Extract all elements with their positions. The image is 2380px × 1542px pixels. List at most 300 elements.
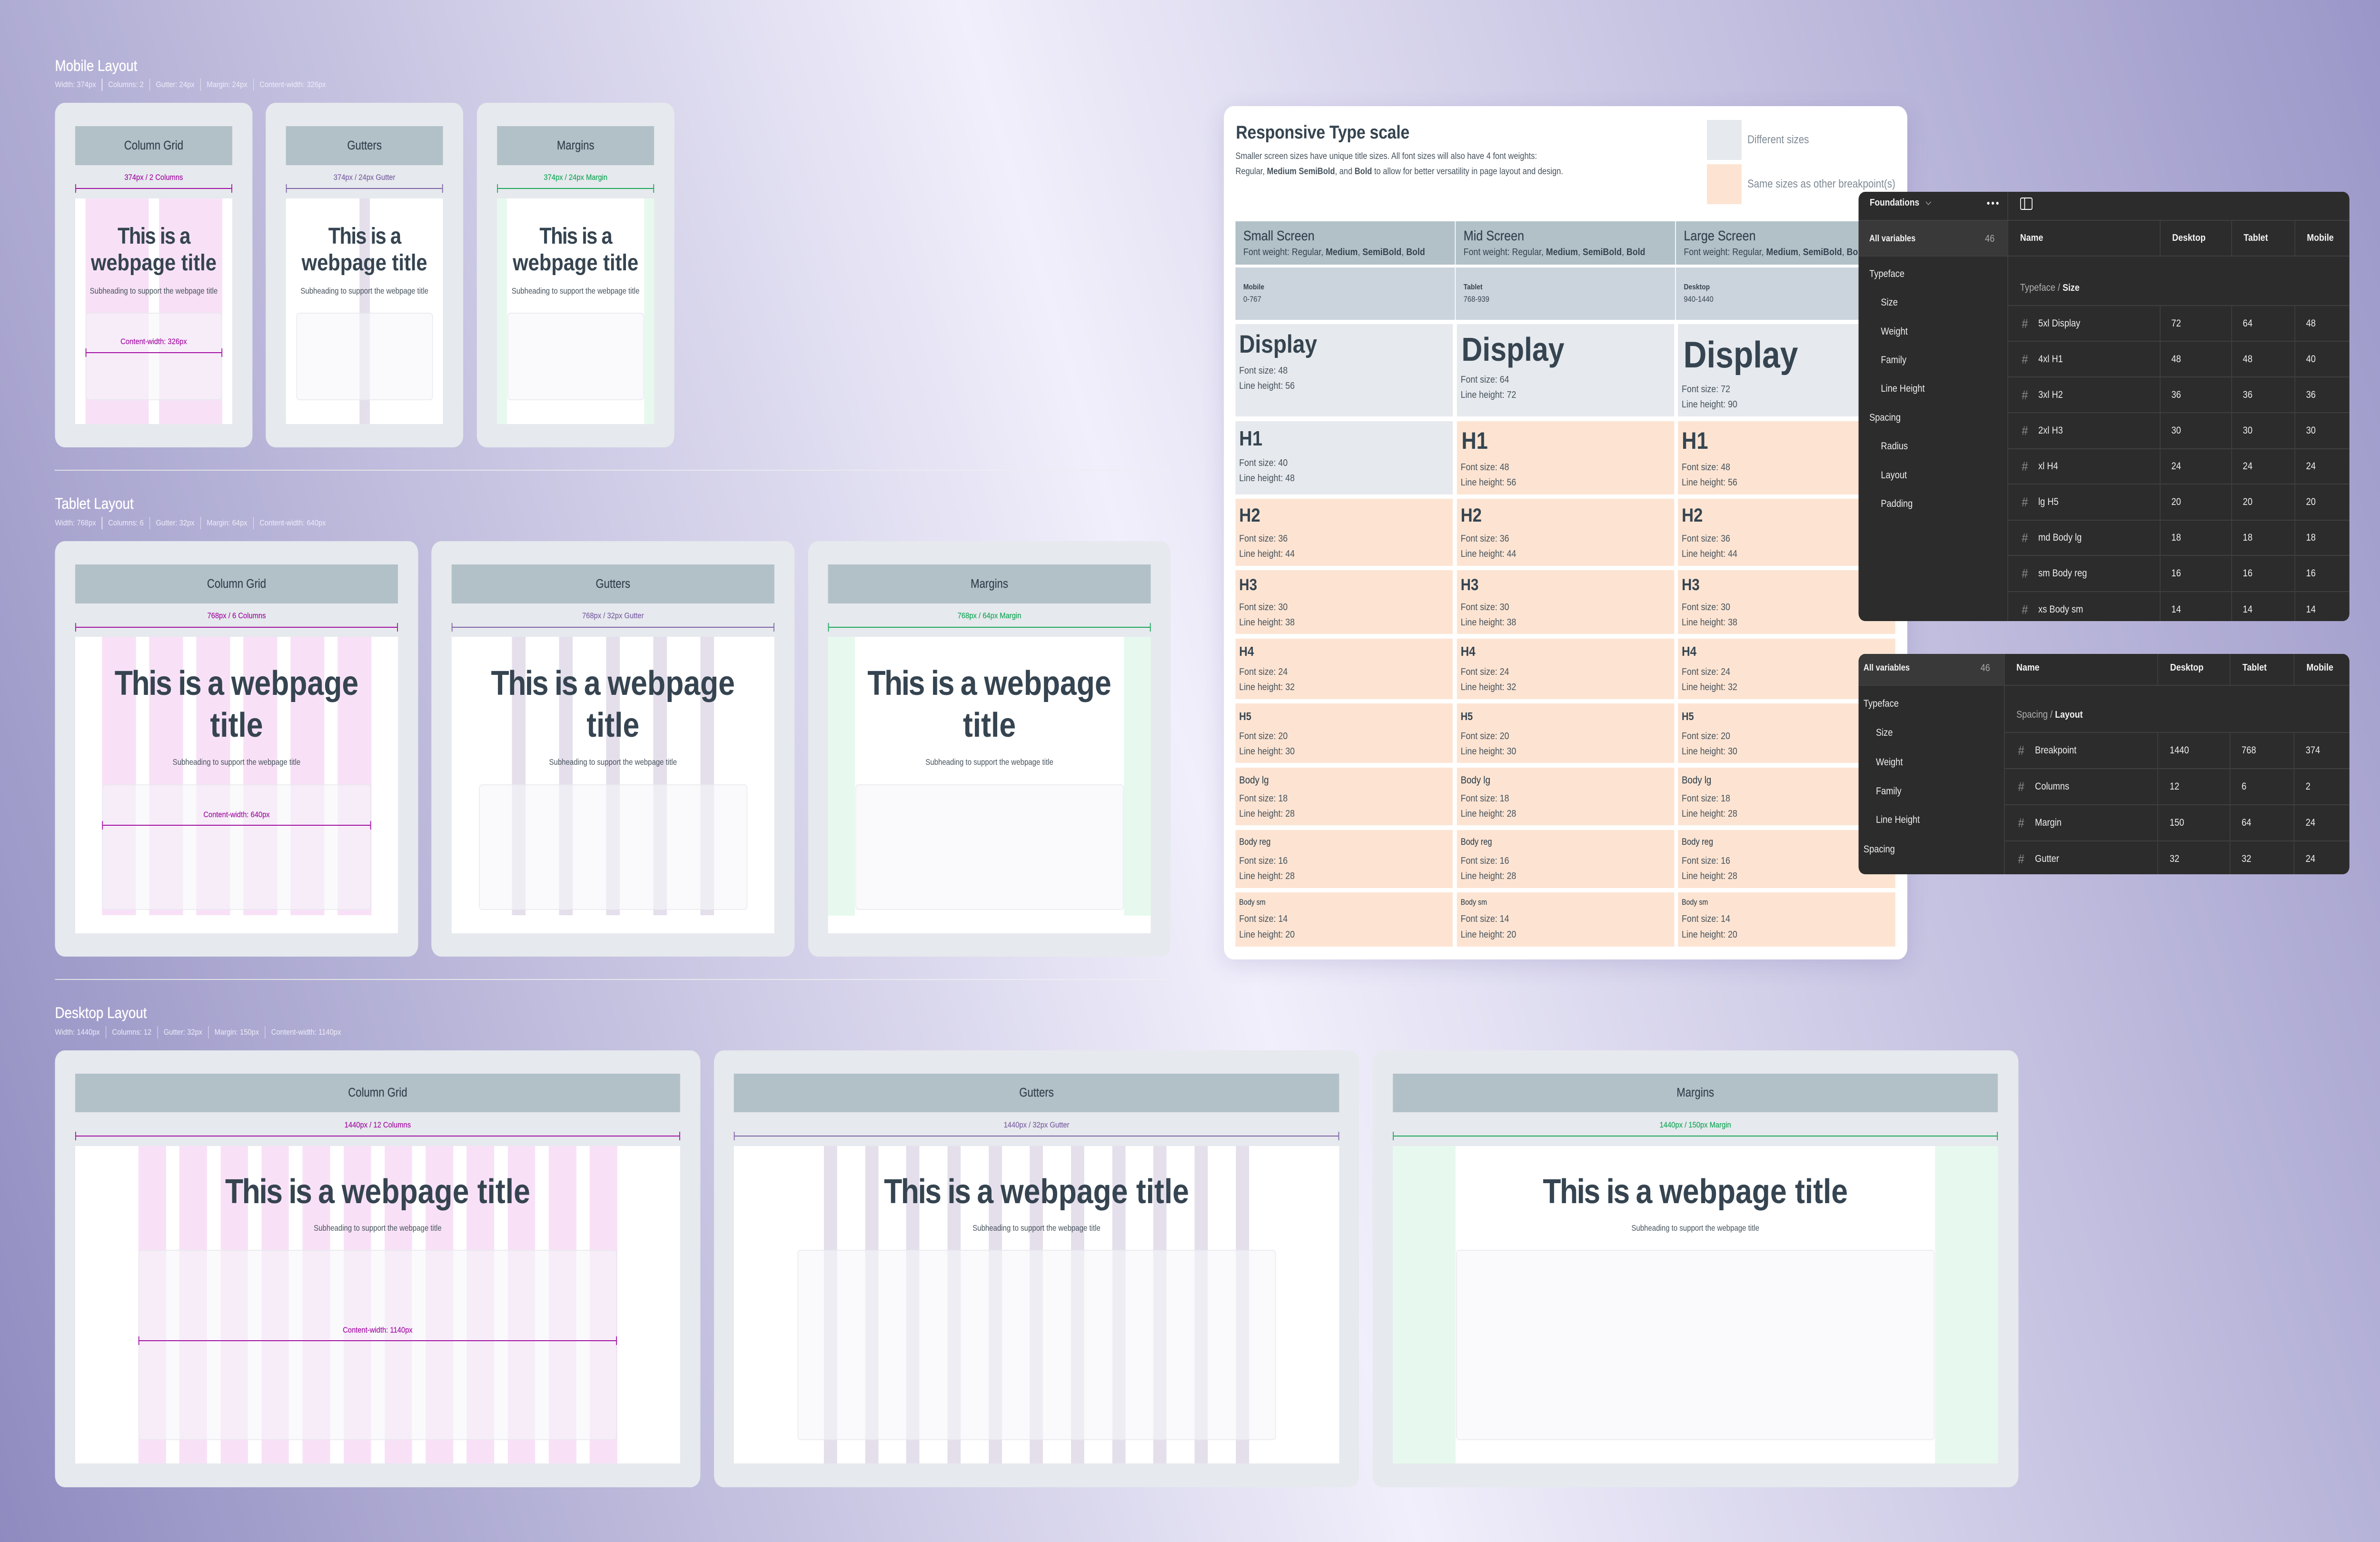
cell: h3 mid: Line height: 38: [1461, 617, 1516, 628]
row: breakpoint: 374: [2306, 745, 2320, 756]
spec line: mobile: Gutter: 24px: [156, 80, 195, 89]
panel: mobile gutters: Gutters: [347, 139, 382, 152]
row: xl h4: [2020, 449, 2342, 484]
collection name: Foundations: [1870, 198, 1919, 208]
cell: display mid: Line height: 72: [1461, 389, 1516, 400]
cell: display small: Display: [1239, 330, 1317, 358]
spec line: desktop: Margin: 150px: [215, 1028, 259, 1037]
row: xs body sm: #: [2022, 603, 2028, 617]
row: md body lg: [2020, 520, 2342, 555]
row: 5xl display: [2020, 306, 2342, 341]
row: 4xl h1: 48: [2243, 354, 2252, 365]
cell: body sm large: [1678, 892, 1895, 947]
content box: [102, 784, 371, 910]
cell: h4 small: Font size: 24: [1239, 666, 1288, 677]
content width line: [102, 821, 371, 830]
cell: h1 mid: Line height: 56: [1461, 477, 1516, 488]
cell: body lg large: Line height: 28: [1682, 808, 1737, 819]
page mock: [75, 198, 232, 424]
spec line: tablet: Content-width: 640px: [259, 518, 326, 527]
row: 2xl h3: 2xl H3: [2038, 425, 2063, 436]
page title: [75, 662, 398, 746]
cell: h4 large: H4: [1682, 644, 1696, 659]
row: gutter: Gutter: [2035, 853, 2059, 864]
cell: h5 small: Line height: 30: [1239, 746, 1295, 757]
spec line: desktop: Columns: 12: [112, 1028, 151, 1037]
table header row: [1235, 221, 1895, 320]
row: breakpoint: #: [2018, 743, 2024, 758]
cell: body sm mid: Body sm: [1461, 898, 1487, 907]
sidebar list: Typeface: [1869, 268, 1904, 279]
panel: desktop column grid: [55, 1050, 700, 1487]
dimension line: [286, 184, 443, 193]
subheading: Subheading to support the webpage title: [300, 286, 428, 296]
subheading: Subheading to support the webpage title: [549, 757, 677, 767]
content box: [797, 1250, 1276, 1440]
page title: This is a webpage title: [1543, 1173, 1848, 1211]
panel: mobile margins: [477, 103, 674, 447]
page title: webpage title: [513, 250, 638, 276]
type scale description: [1235, 149, 1607, 179]
row: columns: #: [2018, 780, 2024, 794]
cell: h1 small: H1: [1239, 427, 1262, 450]
cell: body reg small: Line height: 28: [1239, 870, 1295, 881]
cell: display large: Font size: 72: [1682, 384, 1730, 395]
content width line: [86, 348, 222, 357]
cell: h5 mid: [1457, 703, 1674, 763]
cell: body reg mid: Font size: 16: [1461, 855, 1509, 866]
row: margin: 64: [2241, 817, 2251, 828]
panel: variables typeface size: [1859, 192, 2350, 621]
cell: h2 large: H2: [1682, 505, 1703, 526]
row: lg h5: 20: [2243, 496, 2252, 507]
cell: h3 mid: H3: [1461, 576, 1478, 594]
cell: h5 large: H5: [1682, 710, 1694, 722]
heading: Desktop Layout: Desktop Layout: [55, 1004, 147, 1021]
cell: body reg mid: [1457, 830, 1674, 888]
table header: Mobile: [2306, 662, 2333, 673]
cell: h4 small: Line height: 32: [1239, 682, 1295, 692]
row: sm body reg: 16: [2243, 568, 2252, 579]
row: breakpoint: 1440: [2170, 745, 2189, 756]
row: margin: [2016, 805, 2343, 840]
panel: responsive type scale: [1224, 106, 1907, 959]
row: sm body reg: sm Body reg: [2038, 568, 2087, 579]
sidebar list: Line Height: [1876, 814, 1920, 825]
table header: Tablet: [2244, 232, 2268, 243]
cell: display mid: [1457, 324, 1674, 416]
cell: h2 large: [1678, 499, 1895, 566]
cell: h3 small: Font size: 30: [1239, 602, 1288, 613]
cell: display small: Line height: 56: [1239, 380, 1295, 391]
sidebar list: [1864, 697, 1987, 857]
panel: variables spacing layout: [1859, 654, 2350, 874]
page title: title: [586, 706, 639, 744]
page title: webpage title: [302, 250, 427, 276]
active row: all variables: [1859, 654, 2004, 685]
row: lg h5: #: [2022, 495, 2028, 509]
breakpoint: mobile: Mobile: [1243, 283, 1264, 291]
cell: display mid: Display: [1461, 331, 1564, 368]
cell: h2 small: Line height: 44: [1239, 548, 1295, 559]
content box: [1456, 1250, 1934, 1440]
row: breakpoint: [2016, 733, 2343, 768]
cell: h4 small: [1235, 639, 1453, 699]
width label: 1440px / 150px Margin: [1660, 1120, 1731, 1129]
row: md body lg: 18: [2243, 532, 2252, 543]
table header: Mobile: [2307, 232, 2334, 243]
dimension line: [75, 1132, 680, 1140]
breakpoint: tablet: 768-939: [1464, 295, 1489, 304]
cell: h5 small: Font size: 20: [1239, 731, 1288, 741]
panel: desktop column grid: Column Grid: [348, 1086, 407, 1099]
page title: [497, 223, 654, 277]
row: xl h4: #: [2022, 459, 2028, 474]
cell: body reg small: [1235, 830, 1453, 888]
row: 4xl h1: 48: [2172, 354, 2181, 365]
cell: body lg small: Body lg: [1239, 774, 1269, 786]
cell: h1 mid: [1457, 421, 1674, 494]
active row: all variables: [1859, 220, 2007, 256]
page title: title: [963, 706, 1016, 744]
cell: body lg small: Line height: 28: [1239, 808, 1295, 819]
row: 5xl display: #: [2022, 316, 2028, 331]
cell: h2 mid: Font size: 36: [1461, 533, 1509, 544]
cell: body lg mid: [1457, 768, 1674, 825]
cell: body sm small: Body sm: [1239, 898, 1266, 907]
sidebar list: Typeface: [1864, 698, 1899, 709]
cell: body sm small: Font size: 14: [1239, 913, 1288, 924]
spec line: desktop: [55, 1027, 341, 1038]
page mock: [734, 1146, 1339, 1463]
page title: This is a webpage: [491, 664, 735, 702]
row: gutter: 32: [2170, 853, 2179, 864]
row: margin: 150: [2170, 817, 2184, 828]
row: sm body reg: 16: [2306, 568, 2316, 579]
content width label: Content-width: 326px: [120, 337, 187, 346]
legend: same sizes: Same sizes as other breakpoint(s): [1747, 178, 1895, 190]
spec line: mobile: Width: 374px: [55, 80, 96, 89]
spec line: tablet: [55, 517, 326, 529]
breakpoint: desktop: 940-1440: [1684, 295, 1714, 304]
row: 5xl display: 64: [2243, 318, 2252, 329]
cell: h1 mid: H1: [1461, 427, 1488, 454]
cell: h1 small: [1235, 421, 1453, 494]
cell: h3 mid: Font size: 30: [1461, 602, 1509, 613]
table header: Desktop: [2172, 232, 2206, 243]
cell: body reg large: Font size: 16: [1682, 855, 1730, 866]
row: margin: 24: [2306, 817, 2315, 828]
cell: display small: Font size: 48: [1239, 365, 1288, 376]
row: 3xl h2: 3xl H2: [2038, 389, 2063, 400]
spec line: tablet: Width: 768px: [55, 518, 96, 527]
row: 4xl h1: #: [2022, 352, 2028, 366]
cell: h4 mid: H4: [1461, 644, 1476, 659]
cell: h4 mid: Font size: 24: [1461, 666, 1509, 677]
sidebar list: Size: [1876, 727, 1893, 738]
cell: h3 large: Line height: 38: [1682, 617, 1737, 628]
cell: body lg large: [1678, 768, 1895, 825]
cell: h1 small: Font size: 40: [1239, 457, 1288, 468]
cell: h4 mid: Line height: 32: [1461, 682, 1516, 692]
sidebar list: Padding: [1881, 498, 1913, 509]
breadcrumb: Typeface / Size: [2020, 282, 2080, 293]
page mock: [75, 637, 398, 933]
cell: h3 mid: [1457, 570, 1674, 634]
dimension line: [1393, 1132, 1998, 1140]
panel: tablet gutters: [431, 541, 794, 957]
row: gutter: 32: [2241, 853, 2251, 864]
row: xs body sm: [2020, 592, 2342, 621]
row: 2xl h3: 30: [2172, 425, 2181, 436]
cell: h4 large: Font size: 24: [1682, 666, 1730, 677]
spec line: mobile: Content-width: 326px: [259, 80, 326, 89]
cell: h3 large: H3: [1682, 576, 1700, 594]
dimension line: [734, 1132, 1339, 1140]
cell: h3 large: [1678, 570, 1895, 634]
header: small screen: Font weight: Regular, Medium, SemiBold, Bold: [1243, 247, 1425, 257]
icon: sidebar toggle: [2020, 198, 2033, 210]
panel: mobile column grid: Column Grid: [124, 139, 183, 152]
cell: body sm small: [1235, 892, 1453, 947]
cell: display large: Display: [1683, 334, 1798, 376]
row: 2xl h3: [2020, 413, 2342, 448]
content box: [86, 313, 222, 400]
panel: desktop gutters: [714, 1050, 1359, 1487]
panel: tablet gutters: Gutters: [595, 577, 630, 591]
cell: display large: [1678, 324, 1895, 416]
cell: h2 large: Line height: 44: [1682, 548, 1737, 559]
page title: webpage title: [91, 250, 217, 276]
cell: body lg large: Body lg: [1682, 774, 1711, 786]
cell: h5 large: [1678, 703, 1895, 763]
cell: h4 large: Line height: 32: [1682, 682, 1737, 692]
row: columns: [2016, 769, 2343, 804]
spec line: tablet: Columns: 6: [108, 518, 144, 527]
type scale title: Responsive Type scale: [1236, 122, 1409, 143]
row: md body lg: #: [2022, 531, 2028, 545]
cell: h2 small: [1235, 499, 1453, 566]
row: sm body reg: 16: [2172, 568, 2181, 579]
row: 3xl h2: 36: [2243, 389, 2252, 400]
subheading: Subheading to support the webpage title: [1631, 1223, 1759, 1233]
sidebar list: Weight: [1876, 757, 1903, 768]
subheading: Subheading to support the webpage title: [173, 757, 300, 767]
cell: body sm mid: [1457, 892, 1674, 947]
type scale description: Regular, Medium SemiBold, and Bold to allow for better versatility in page layout and design.: [1235, 167, 1563, 177]
icon: more dots: [1987, 201, 1999, 205]
cell: h1 mid: Font size: 48: [1461, 462, 1509, 473]
row: 2xl h3: 30: [2306, 425, 2316, 436]
cell: h2 small: Font size: 36: [1239, 533, 1288, 544]
row: xl h4: 24: [2306, 461, 2316, 472]
cell: body sm mid: Line height: 20: [1461, 929, 1516, 940]
page mock: [75, 1146, 680, 1463]
subheading: Subheading to support the webpage title: [925, 757, 1053, 767]
cell: h4 small: H4: [1239, 644, 1254, 659]
row: lg h5: 20: [2306, 496, 2316, 507]
page title: This is a: [118, 224, 190, 249]
row: 5xl display: 72: [2172, 318, 2181, 329]
table header: Name: [2020, 232, 2043, 243]
spec line: tablet: Margin: 64px: [207, 518, 248, 527]
cell: h5 small: [1235, 703, 1453, 763]
header: mid screen: [1456, 221, 1675, 265]
content width label: Content-width: 640px: [203, 810, 270, 819]
page title: This is a: [539, 224, 612, 249]
cell: h2 mid: Line height: 44: [1461, 548, 1516, 559]
cell: h1 small: Line height: 48: [1239, 473, 1295, 484]
sidebar list: Family: [1876, 786, 1902, 797]
cell: body reg mid: Line height: 28: [1461, 870, 1516, 881]
row: 3xl h2: [2020, 377, 2342, 412]
cell: h5 large: Font size: 20: [1682, 731, 1730, 741]
row: 3xl h2: 36: [2306, 389, 2316, 400]
cell: h3 small: Line height: 38: [1239, 617, 1295, 628]
breakpoint: mobile: 0-767: [1243, 295, 1261, 304]
panel: mobile margins: Margins: [557, 139, 595, 152]
row: md body lg: 18: [2172, 532, 2181, 543]
cell: body sm large: Font size: 14: [1682, 913, 1730, 924]
row: xs body sm: 14: [2306, 604, 2316, 615]
spec line: desktop: Gutter: 32px: [164, 1028, 202, 1037]
row: columns: 6: [2241, 781, 2246, 792]
table header: [2016, 661, 2343, 675]
breadcrumb: Spacing / Layout: [2016, 709, 2083, 720]
row: 3xl h2: 36: [2172, 389, 2181, 400]
sidebar list: Layout: [1881, 470, 1907, 481]
breakpoint: desktop: [1676, 267, 1895, 320]
width label: 1440px / 12 Columns: [345, 1120, 411, 1129]
row: lg h5: lg H5: [2038, 496, 2059, 507]
dimension line: [497, 184, 654, 193]
table header: Desktop: [2170, 662, 2203, 673]
cell: h2 small: H2: [1239, 505, 1260, 526]
panel: desktop margins: [1373, 1050, 2018, 1487]
header: large screen: Large Screen: [1684, 228, 1755, 244]
cell: h5 mid: Line height: 30: [1461, 746, 1516, 757]
content width line: [139, 1336, 617, 1345]
icon: chevron: [1925, 201, 1931, 206]
cell: h5 mid: H5: [1461, 710, 1473, 722]
panel: tablet column grid: [55, 541, 418, 957]
cell: h4 mid: [1457, 639, 1674, 699]
cell: body lg large: Font size: 18: [1682, 793, 1730, 804]
header: small screen: [1235, 221, 1455, 265]
page mock: [497, 198, 654, 424]
width label: 374px / 24px Gutter: [334, 173, 395, 182]
row: margin: Margin: [2035, 817, 2062, 828]
panel: tablet margins: Margins: [971, 577, 1008, 591]
cell: body lg mid: Line height: 28: [1461, 808, 1516, 819]
table header: Tablet: [2242, 662, 2267, 673]
cell: body lg small: [1235, 768, 1453, 825]
breakpoint: desktop: Desktop: [1684, 283, 1710, 291]
content box: [479, 784, 747, 910]
content box: [855, 784, 1124, 910]
cell: body reg mid: Body reg: [1461, 837, 1492, 847]
row: columns: 12: [2170, 781, 2179, 792]
row: sm body reg: [2020, 556, 2342, 591]
row: md body lg: 18: [2306, 532, 2316, 543]
subheading: Subheading to support the webpage title: [512, 286, 639, 296]
content box: [139, 1250, 617, 1440]
cell: h2 large: Font size: 36: [1682, 533, 1730, 544]
row: gutter: #: [2018, 852, 2024, 866]
type scale description: Smaller screen sizes have unique title sizes. All font sizes will also have 4 font weights:: [1235, 151, 1537, 161]
page mock: [286, 198, 443, 424]
width label: 1440px / 32px Gutter: [1004, 1120, 1069, 1129]
cell: body sm small: Line height: 20: [1239, 929, 1295, 940]
width label: 374px / 24px Margin: [544, 173, 607, 182]
dimension line: [75, 623, 398, 632]
row: md body lg: md Body lg: [2038, 532, 2082, 543]
table header: [2020, 231, 2342, 245]
cell: body reg small: Body reg: [1239, 837, 1270, 847]
row: 2xl h3: #: [2022, 424, 2028, 438]
row: lg h5: [2020, 484, 2342, 519]
content width label: Content-width: 1140px: [343, 1325, 413, 1334]
cell: display small: [1235, 324, 1453, 416]
breakpoint: mobile: [1235, 267, 1455, 320]
width label: 374px / 2 Columns: [124, 173, 183, 182]
sidebar list: Weight: [1881, 326, 1908, 337]
row: xl h4: xl H4: [2038, 461, 2058, 472]
cell: h1 large: Line height: 56: [1682, 477, 1737, 488]
cell: h3 large: Font size: 30: [1682, 602, 1730, 613]
row: sm body reg: #: [2022, 566, 2028, 581]
content box: [296, 313, 433, 400]
sidebar list: Size: [1881, 297, 1898, 308]
cell: h5 large: Line height: 30: [1682, 746, 1737, 757]
sidebar list: Family: [1881, 355, 1906, 366]
dimension line: [75, 184, 232, 193]
variable count: 46: [1981, 662, 1990, 673]
page title: [286, 223, 443, 277]
row: 5xl display: 48: [2306, 318, 2316, 329]
row: breakpoint: 768: [2241, 745, 2256, 756]
row: 4xl h1: 40: [2306, 354, 2316, 365]
cell: h5 small: H5: [1239, 710, 1251, 722]
page title: [75, 223, 232, 277]
page title: This is a webpage: [867, 664, 1111, 702]
subheading: Subheading to support the webpage title: [90, 286, 218, 296]
sidebar list: [1869, 267, 1993, 511]
sidebar list: Radius: [1881, 441, 1908, 452]
breakpoint: tablet: Tablet: [1464, 283, 1483, 291]
variable count: 46: [1985, 233, 1994, 244]
cell: body sm mid: Font size: 14: [1461, 913, 1509, 924]
cell: h3 small: H3: [1239, 576, 1257, 594]
page title: title: [210, 706, 263, 744]
header: large screen: Font weight: Regular, Medium, SemiBold, Bold: [1684, 247, 1865, 257]
page title: This is a webpage title: [884, 1173, 1189, 1211]
table header: Name: [2016, 662, 2040, 673]
row: 3xl h2: #: [2022, 388, 2028, 402]
heading: Tablet Layout: Tablet Layout: [55, 495, 134, 512]
cell: h1 large: [1678, 421, 1895, 494]
panel: tablet margins: [808, 541, 1170, 957]
row: xs body sm: xs Body sm: [2038, 604, 2083, 615]
row: 4xl h1: 4xl H1: [2038, 354, 2063, 365]
row: xl h4: 24: [2243, 461, 2252, 472]
sidebar list: Spacing: [1869, 412, 1901, 423]
header: large screen: [1676, 221, 1895, 265]
cell: body lg mid: Font size: 18: [1461, 793, 1509, 804]
width label: 768px / 6 Columns: [207, 611, 266, 620]
cell: body reg large: Line height: 28: [1682, 870, 1737, 881]
row: 5xl display: 5xl Display: [2038, 318, 2080, 329]
